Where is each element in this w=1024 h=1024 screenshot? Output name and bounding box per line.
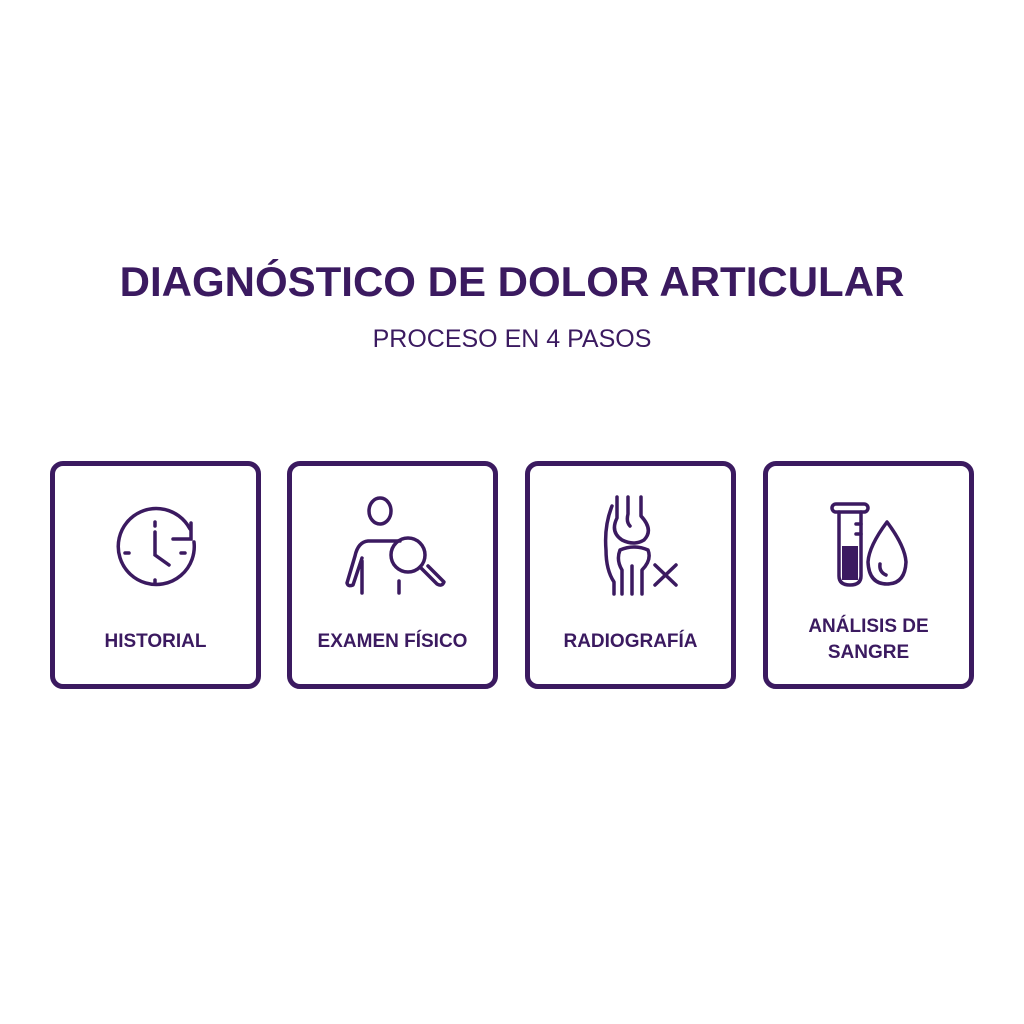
title: DIAGNÓSTICO DE DOLOR ARTICULAR <box>120 258 904 305</box>
panel: análisis de sangre <box>763 461 974 689</box>
label: SANGRE <box>828 642 909 663</box>
label <box>808 614 929 663</box>
icon: test tube and drop <box>830 502 908 587</box>
panel: historial <box>50 461 261 689</box>
icon: person with magnifier <box>345 496 446 595</box>
subtitle: PROCESO EN 4 PASOS <box>373 325 651 353</box>
label: RADIOGRAFÍA <box>563 631 698 652</box>
label: HISTORIAL <box>104 631 207 652</box>
panel: examen físico <box>287 461 498 689</box>
icon: clock with arrow <box>116 506 196 586</box>
label: ANÁLISIS DE <box>808 616 929 637</box>
icon: knee joint with x <box>604 495 678 596</box>
label: EXAMEN FÍSICO <box>318 631 467 652</box>
panel: radiografía <box>525 461 736 689</box>
